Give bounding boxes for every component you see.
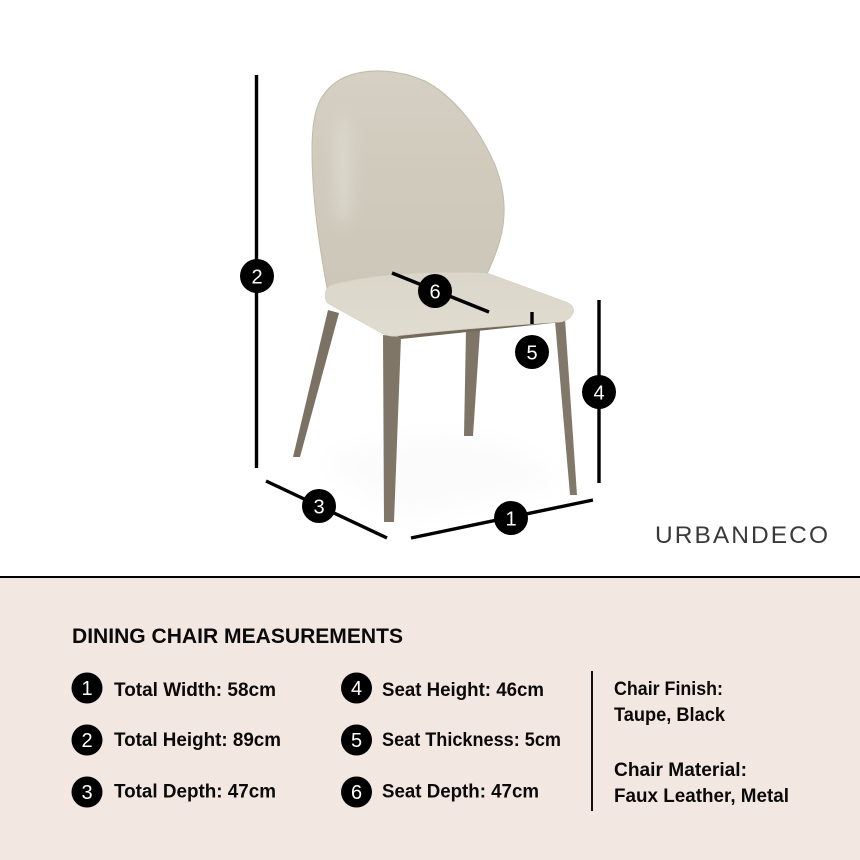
item 6: 6	[351, 782, 362, 804]
chair material	[614, 759, 789, 807]
dimension 1: total width	[411, 500, 593, 538]
chair material: Chair Material:	[614, 759, 747, 781]
item 2: 2	[81, 730, 93, 752]
item 2: Total Height: 89cm	[114, 729, 281, 751]
chair illustration	[293, 71, 577, 522]
item 6	[341, 776, 539, 808]
item 1: 1	[81, 678, 93, 700]
dimension 3: total depth	[266, 481, 387, 538]
dimension 2: total height	[240, 75, 274, 468]
chair finish: Chair Finish:	[614, 678, 723, 700]
chair rear-right leg	[464, 330, 480, 436]
dimension 1: total width: 1	[505, 508, 517, 530]
chair finish	[614, 678, 725, 726]
dimension 6: seat depth	[392, 273, 489, 312]
item 2	[72, 724, 281, 756]
heading: DINING CHAIR MEASUREMENTS	[72, 625, 403, 648]
item 3: Total Depth: 47cm	[114, 780, 276, 802]
chair backrest	[312, 71, 504, 288]
item 1: Total Width: 58cm	[114, 679, 276, 701]
item 5	[341, 724, 561, 756]
dimension 3: total depth: 3	[313, 496, 325, 518]
item 5: 5	[351, 730, 362, 752]
divider	[591, 671, 593, 811]
seat rail	[396, 319, 562, 339]
dimension 4: seat height	[582, 300, 616, 483]
dimension 4: seat height: 4	[593, 382, 605, 404]
floor shadow	[320, 435, 560, 518]
chair front-left leg	[383, 335, 401, 522]
dimension 6: seat depth: 6	[429, 282, 441, 304]
chair seat	[325, 272, 574, 336]
dimension 5: seat thickness: 5	[526, 342, 538, 364]
chair front-right leg	[555, 319, 577, 495]
item 1	[72, 672, 276, 704]
dimension 5: seat thickness	[515, 312, 549, 369]
item 4: 4	[351, 678, 362, 700]
item 3: 3	[81, 782, 93, 804]
item 6: Seat Depth: 47cm	[382, 780, 539, 802]
chair material: Faux Leather, Metal	[614, 785, 789, 807]
chair rear-left leg	[293, 310, 339, 457]
logo: URBANDECO	[655, 522, 828, 549]
item 3	[72, 776, 276, 808]
dimension 2: total height: 2	[251, 266, 263, 288]
item 5: Seat Thickness: 5cm	[382, 729, 561, 751]
panel: measurements	[0, 577, 860, 860]
item 4: Seat Height: 46cm	[382, 679, 544, 701]
backrest highlight	[335, 115, 351, 225]
item 4	[341, 672, 544, 704]
chair finish: Taupe, Black	[614, 704, 725, 726]
